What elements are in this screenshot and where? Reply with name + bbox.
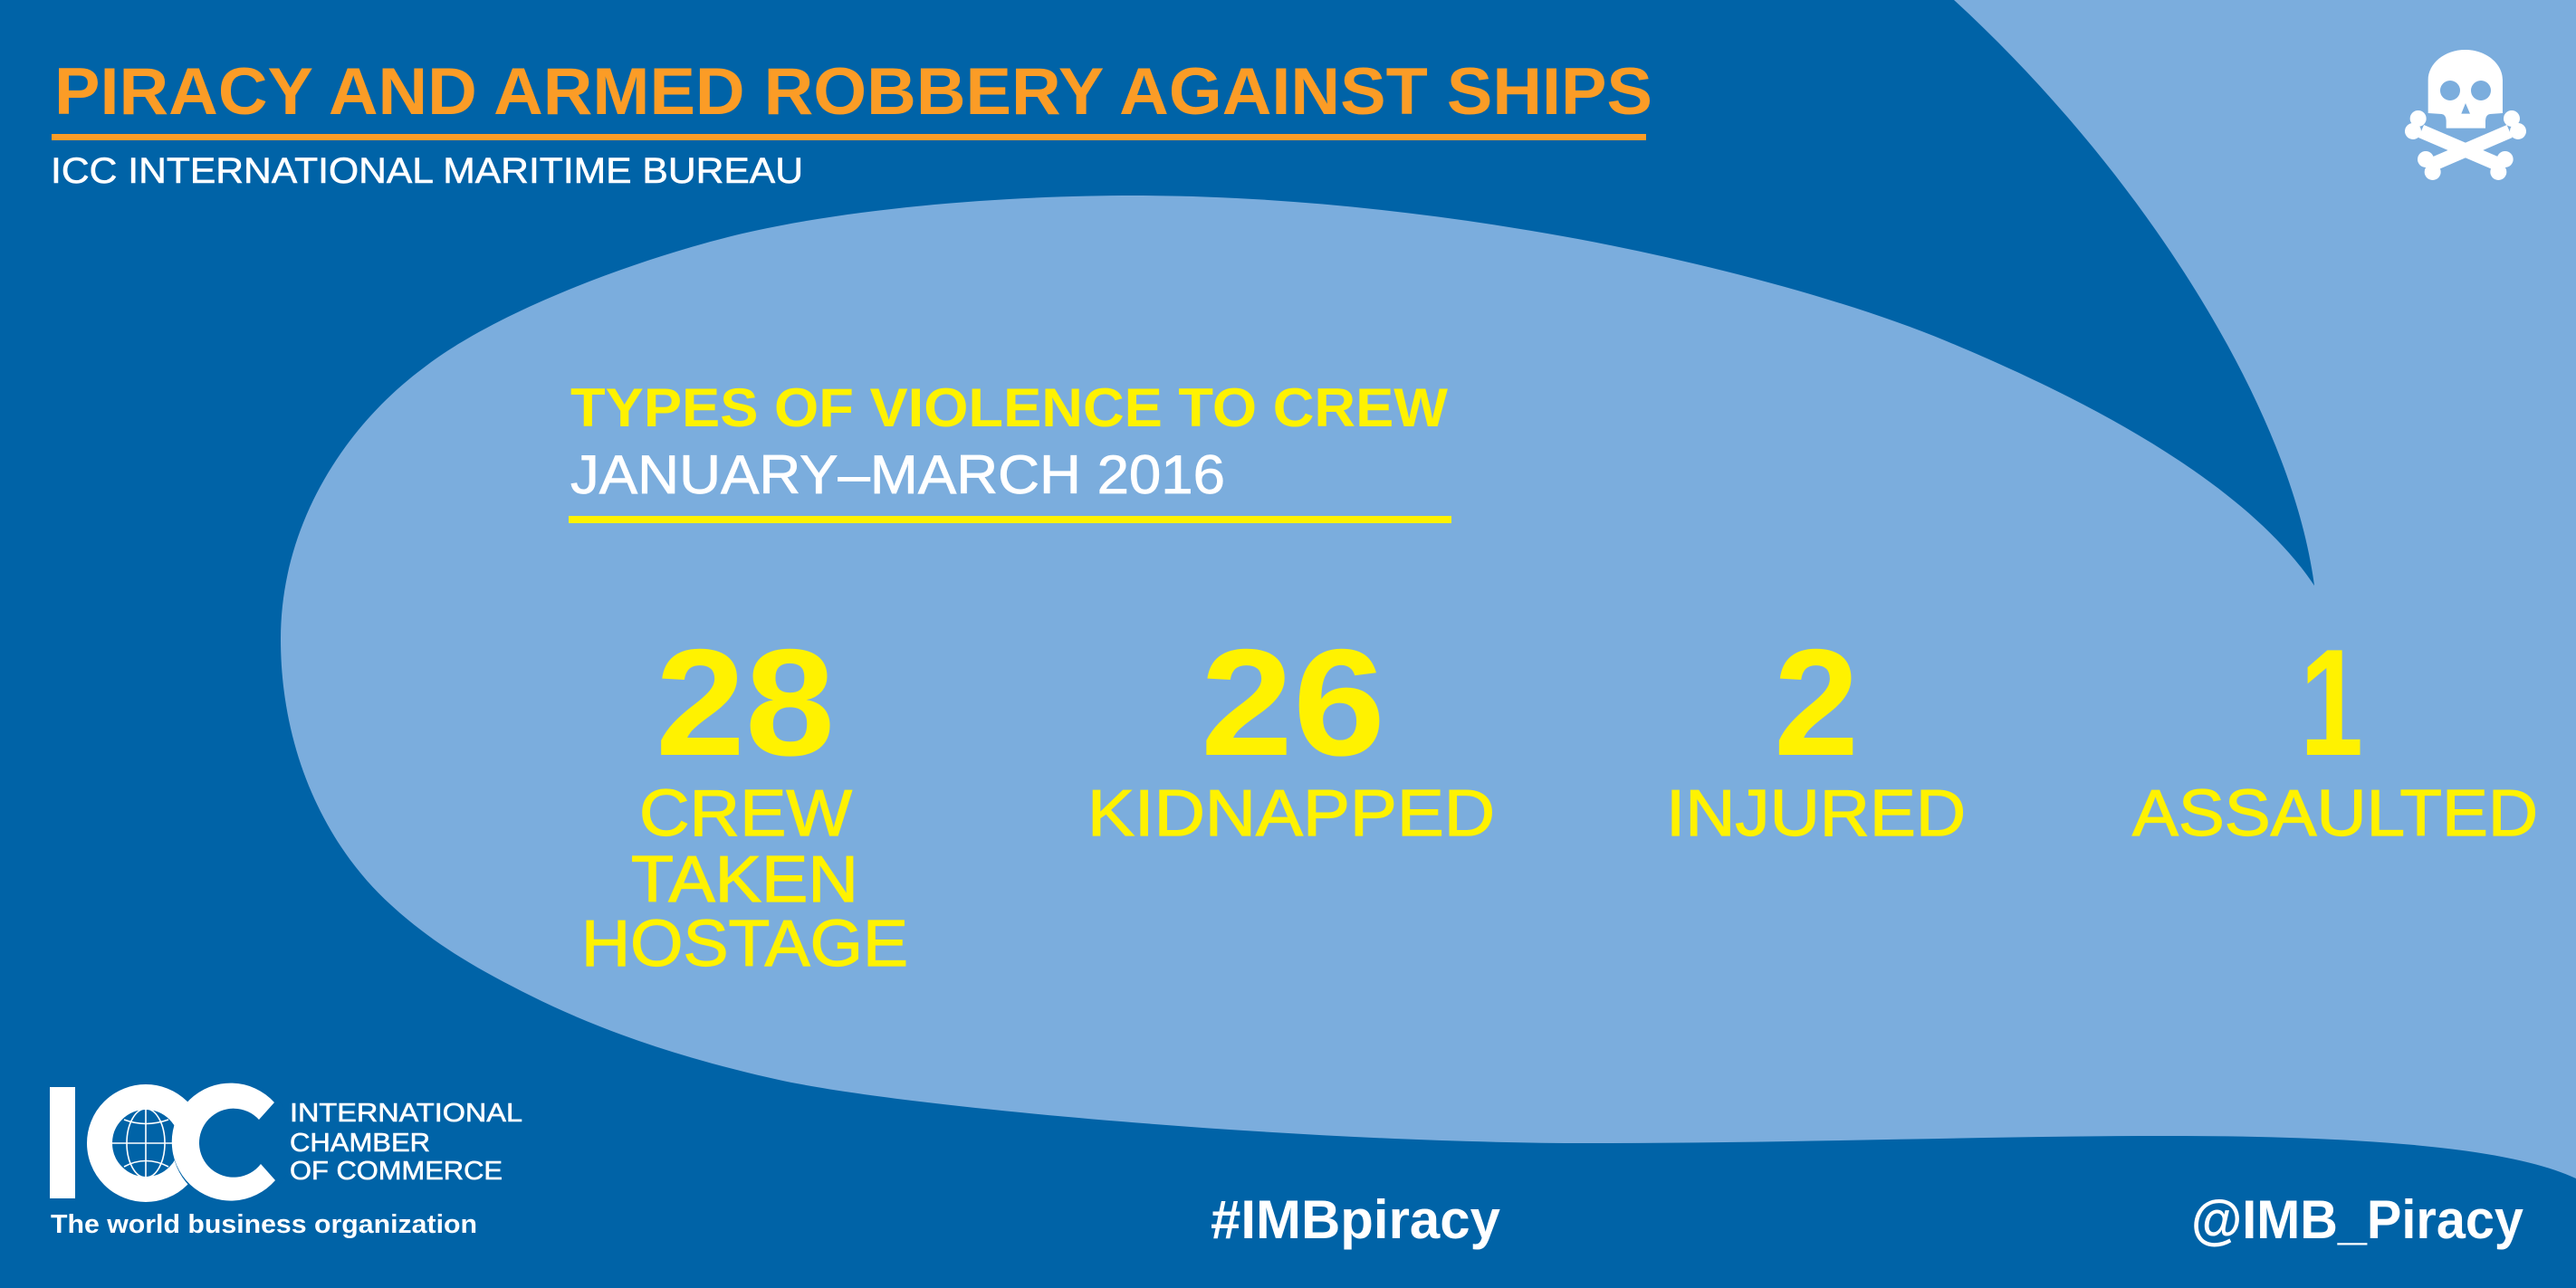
stat: 2 injured — [1666, 617, 1966, 850]
stat: 2 injured: 2 — [1774, 617, 1859, 787]
stat: 1 assaulted: 1 — [2300, 617, 2363, 787]
heading: types of violence: TYPES OF VIOLENCE TO CREW — [570, 377, 1448, 438]
subtitle: ICC INTERNATIONAL MARITIME BUREAU — [51, 151, 803, 191]
logo tagline: The world business organization — [51, 1210, 477, 1239]
section heading — [569, 377, 1451, 523]
logo mark — [50, 1082, 295, 1205]
logo wordmark: CHAMBER — [290, 1129, 430, 1158]
stat: 26 kidnapped: KIDNAPPED — [1087, 778, 1495, 850]
logo: ICC International Chamber of Commerce — [50, 1082, 522, 1239]
stat: 28 crew taken hostage: HOSTAGE — [581, 908, 908, 980]
stat: 28 crew taken hostage — [581, 617, 908, 980]
stat: 28 crew taken hostage: 28 — [656, 617, 835, 787]
logo wordmark — [290, 1099, 522, 1186]
stat: 28 crew taken hostage: TAKEN — [631, 844, 858, 916]
title: PIRACY AND ARMED ROBBERY AGAINST SHIPS — [54, 55, 1652, 129]
stat: 26 kidnapped: 26 — [1201, 617, 1385, 787]
stat: 2 injured: INJURED — [1666, 778, 1966, 850]
hashtag: #IMBpiracy — [1211, 1189, 1501, 1250]
heading underline — [569, 516, 1451, 523]
heading: date range: JANUARY–MARCH 2016 — [570, 444, 1225, 505]
logo wordmark: INTERNATIONAL — [290, 1099, 522, 1128]
icon: skull and crossbones — [2405, 50, 2526, 180]
stat: 26 kidnapped — [1087, 617, 1495, 850]
stat: 1 assaulted — [2132, 617, 2538, 850]
stat: 28 crew taken hostage: CREW — [639, 778, 852, 850]
logo wordmark: OF COMMERCE — [290, 1157, 503, 1186]
title underline — [52, 134, 1646, 140]
twitter handle: @IMB_Piracy — [2191, 1189, 2524, 1250]
stat: 1 assaulted: ASSAULTED — [2132, 778, 2538, 850]
header block — [51, 55, 1652, 191]
